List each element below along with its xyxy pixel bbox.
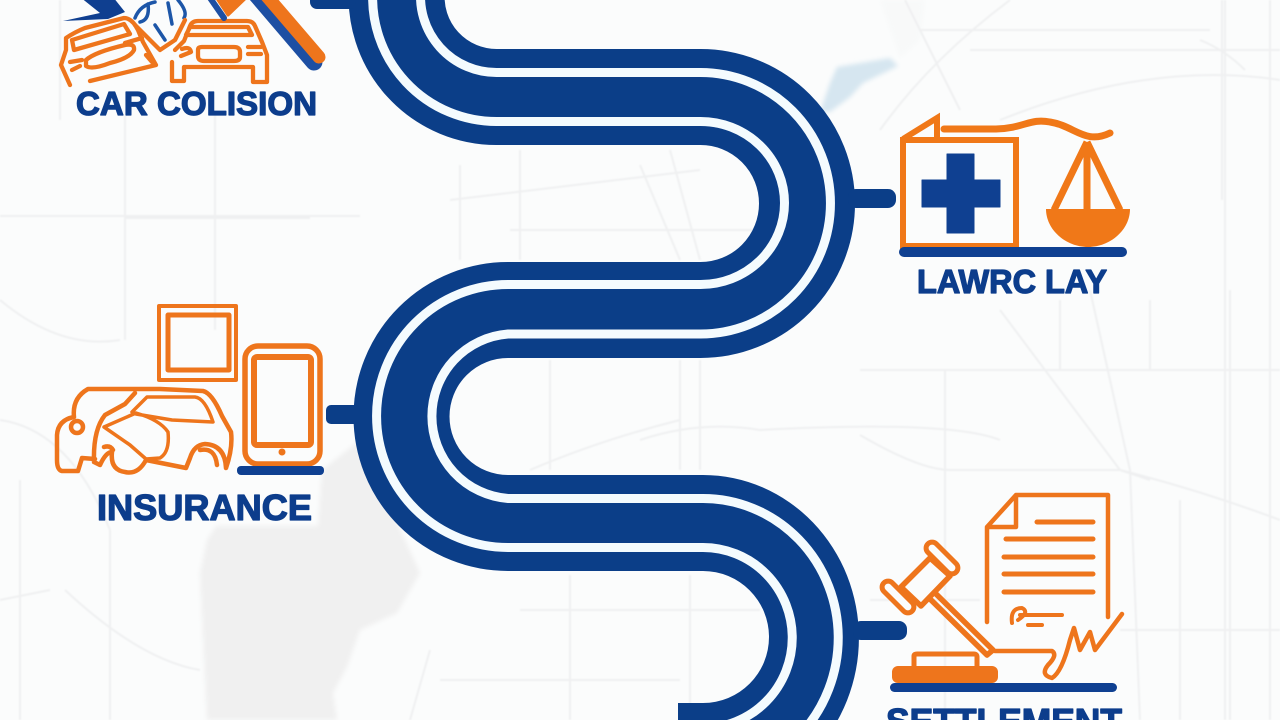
small signature — [1012, 608, 1062, 625]
gavel handle shadow — [256, 0, 314, 62]
gavel handle — [265, 0, 319, 57]
icon: settlement gavel and signed document — [880, 495, 1122, 692]
connector: insurance — [326, 405, 360, 424]
road body upper — [397, 0, 807, 523]
mid debris — [135, 20, 185, 50]
tablet — [245, 346, 320, 464]
document lines — [1004, 522, 1093, 592]
heading: insurance: INSURANCE — [97, 487, 312, 528]
gavel head — [214, 0, 250, 15]
large signature — [995, 614, 1122, 678]
connector: lawyer — [848, 189, 896, 208]
scale strings — [1054, 142, 1120, 210]
medical document — [903, 140, 1016, 246]
road body lower bend — [678, 475, 859, 720]
heading: lawyer: LAWRC LAY — [917, 263, 1107, 300]
gavel cap two — [924, 540, 960, 576]
debris scribble — [135, 0, 185, 40]
sound block top — [914, 654, 977, 667]
picture frame inner — [168, 315, 229, 370]
medical cross — [922, 154, 1000, 233]
gavel handle — [927, 590, 993, 655]
connector: car collision — [310, 0, 356, 9]
gavel head — [901, 558, 950, 606]
scale beam — [944, 121, 1110, 137]
road stripe two — [421, 0, 838, 720]
document fold — [903, 118, 937, 139]
cars — [57, 389, 231, 472]
impact spark — [63, 0, 125, 21]
picture frame — [159, 306, 236, 380]
connector: settlement — [853, 621, 907, 640]
road stripe one — [373, 0, 792, 720]
gavel head shadow — [208, 0, 224, 18]
baseline — [890, 683, 1117, 692]
gavel cap one — [880, 579, 916, 615]
heading: car collision: CAR COLISION — [76, 85, 317, 122]
sound block base — [892, 666, 998, 683]
winding road — [373, 0, 859, 720]
left car — [61, 18, 156, 85]
icon: insurance car, frame and tablet — [57, 306, 324, 475]
icon: car collision — [61, 0, 319, 85]
tablet stand — [237, 466, 324, 475]
baseline — [899, 247, 1127, 257]
tablet screen — [254, 357, 311, 445]
icon: lawyer document and scale — [899, 118, 1130, 257]
document — [987, 495, 1108, 622]
right car — [172, 21, 267, 82]
tablet button — [278, 448, 286, 456]
scale bowl — [1046, 209, 1130, 247]
